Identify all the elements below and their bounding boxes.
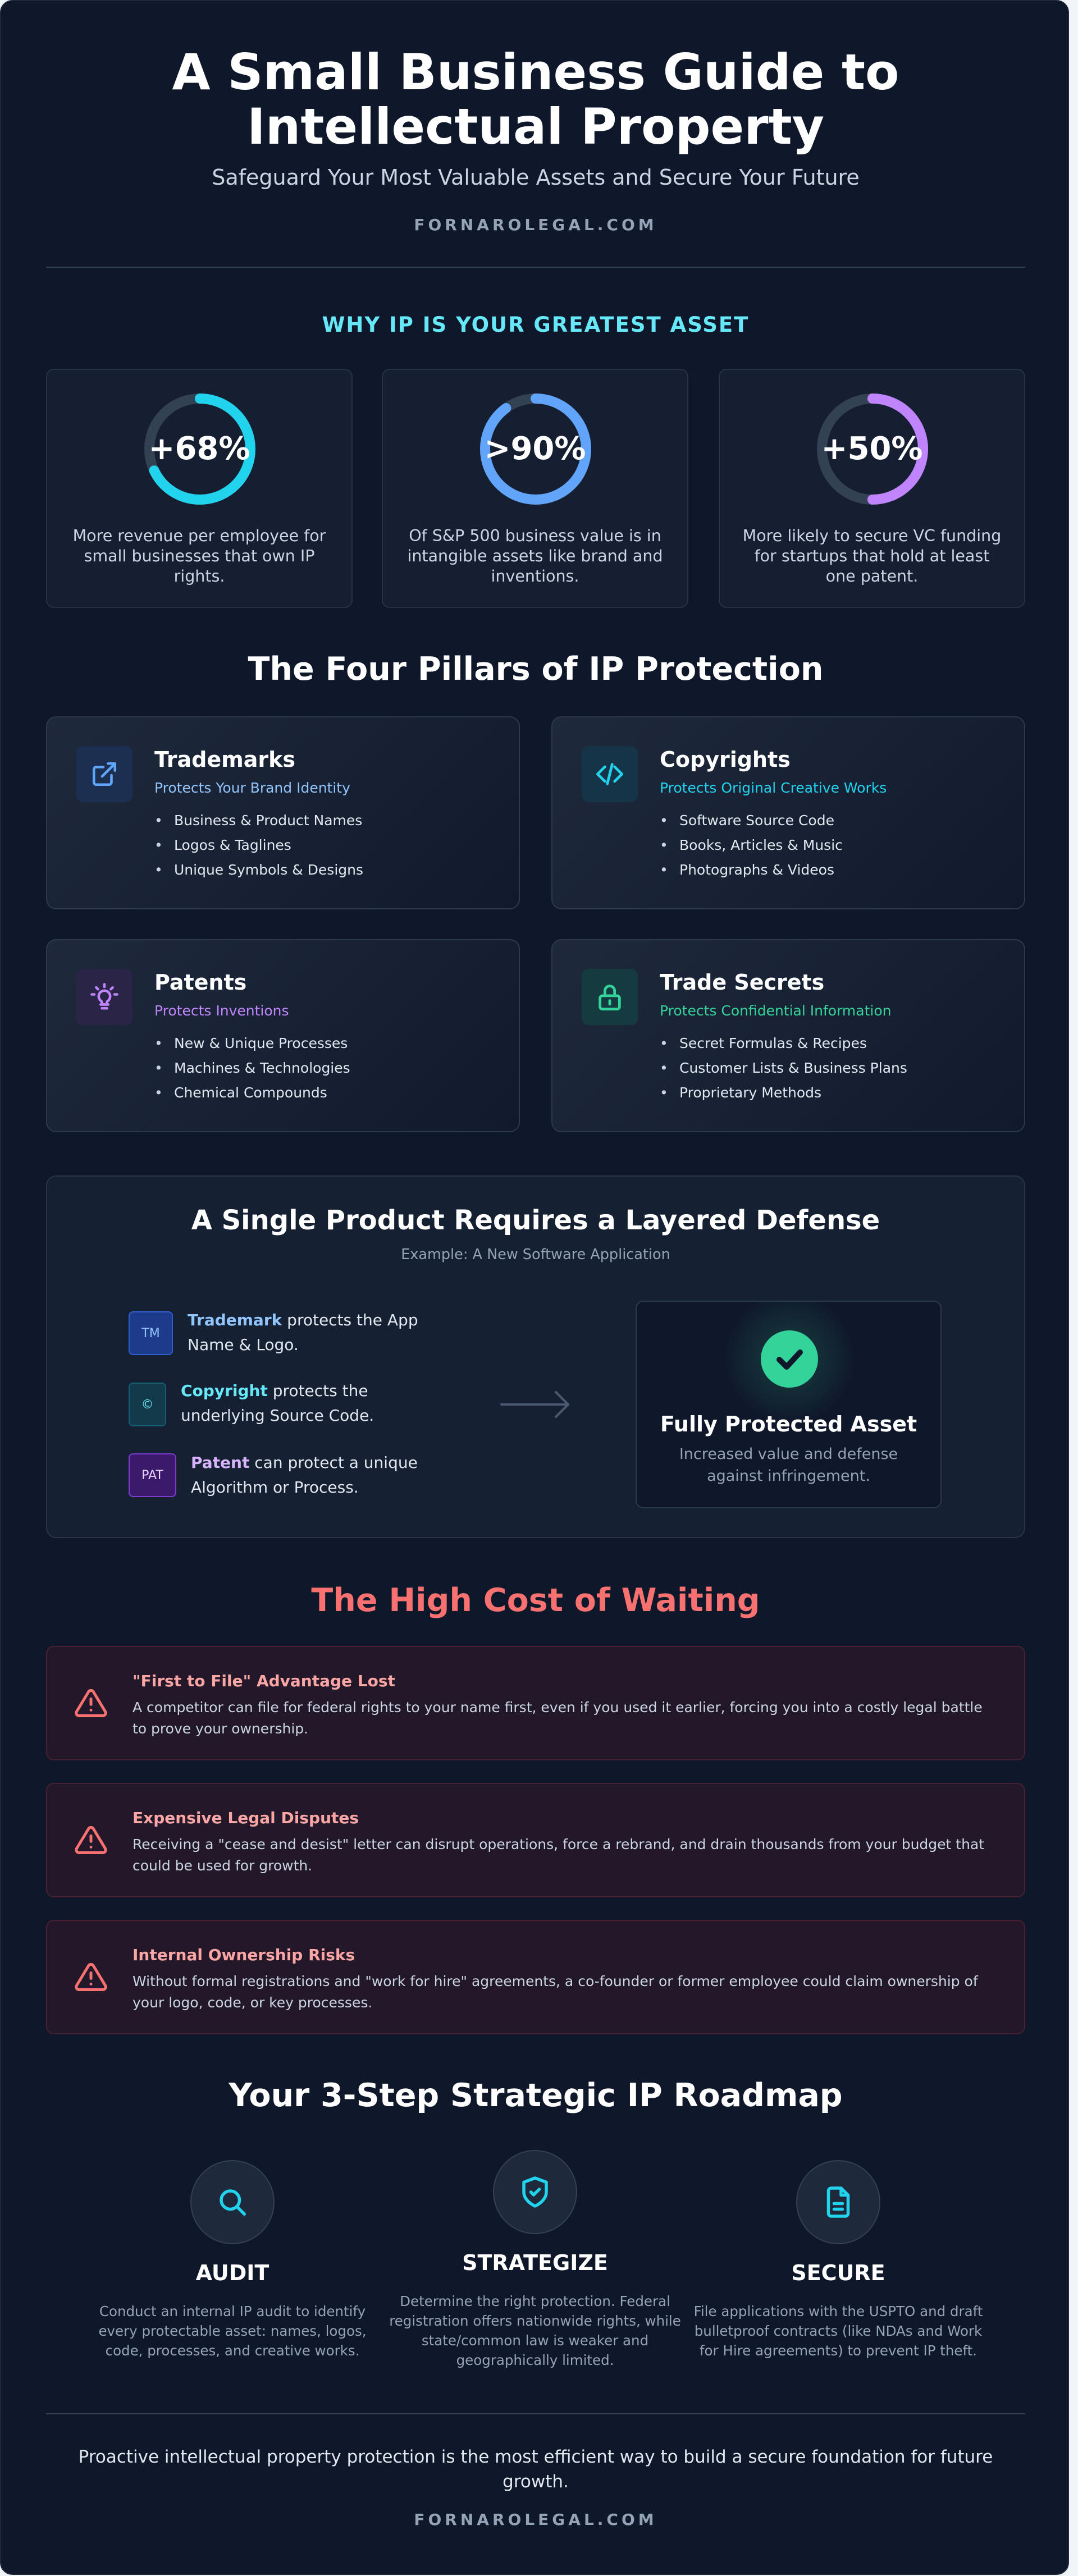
subtitle: Safeguard Your Most Valuable Assets and Secure Your Future bbox=[212, 165, 860, 190]
panel: patents bbox=[46, 939, 520, 1132]
ring chart 50 bbox=[817, 394, 928, 505]
brand: FORNAROLEGAL.COM bbox=[414, 216, 657, 234]
panel: patents: Protects Inventions bbox=[154, 1003, 289, 1019]
item: trademark: Name & Logo. bbox=[188, 1335, 299, 1354]
step: secure: File applications with the USPTO and draft bulletproof contracts (like NDAs and Work for Hire agreements) to prevent IP theft. bbox=[694, 2303, 983, 2359]
icon: warning bbox=[75, 1962, 107, 1991]
panel: patents: Patents bbox=[154, 970, 246, 995]
panel: trademarks: Trademarks bbox=[154, 747, 295, 772]
stat card 3: one patent. bbox=[826, 567, 918, 585]
icon: check bbox=[761, 1330, 818, 1388]
icon: lightbulb bbox=[76, 969, 133, 1025]
warning card 3 bbox=[46, 1920, 1025, 2034]
icon: external link bbox=[76, 746, 133, 802]
title: Intellectual Property bbox=[247, 98, 824, 155]
icon: search bbox=[190, 2160, 275, 2244]
panel: trade secrets: Trade Secrets bbox=[660, 970, 824, 995]
callout: fully protected asset: Increased value and defense bbox=[679, 1445, 898, 1463]
warning card 3: Without formal registrations and "work for hire" agreements, a co-founder or former employee could claim ownership of your logo, code, or key processes. bbox=[133, 1973, 978, 2011]
warning card 2 bbox=[46, 1783, 1025, 1897]
callout: fully protected asset: against infringement. bbox=[707, 1467, 870, 1485]
step: secure bbox=[694, 2160, 983, 2359]
stat card 1: +68% bbox=[149, 431, 250, 467]
item: copyright: © bbox=[141, 1398, 154, 1411]
warning card 1: A competitor can file for federal rights to your name first, even if you used it earlier, forcing you into a costly legal battle bbox=[133, 1699, 983, 1715]
panel: trade secrets: Proprietary Methods bbox=[679, 1085, 821, 1101]
warning card 2: Expensive Legal Disputes bbox=[133, 1809, 359, 1827]
step: audit: AUDIT bbox=[196, 2261, 269, 2285]
stat card 3 bbox=[719, 369, 1025, 608]
stat card 2: inventions. bbox=[491, 567, 579, 585]
panel: copyrights: Books, Articles & Music bbox=[679, 837, 843, 853]
icon: warning bbox=[75, 1689, 107, 1717]
panel: copyrights: Software Source Code bbox=[679, 812, 834, 829]
panel: copyrights: Protects Original Creative Works bbox=[660, 780, 887, 796]
panel: trademarks: Protects Your Brand Identity bbox=[154, 780, 350, 796]
callout: fully protected asset: Fully Protected Asset bbox=[660, 1412, 917, 1436]
item: patent: PAT bbox=[141, 1468, 163, 1482]
ring chart 90 bbox=[480, 394, 591, 505]
warning card 2: Receiving a "cease and desist" letter can disrupt operations, force a rebrand, and drain thousands from your budget that could be used for growth. bbox=[133, 1836, 984, 1874]
stat card 2: >90% bbox=[485, 431, 586, 467]
step: strategize: STRATEGIZE bbox=[462, 2250, 608, 2275]
panel: copyrights bbox=[551, 716, 1025, 909]
stat card 1 bbox=[46, 369, 353, 608]
ring chart 68 bbox=[144, 394, 255, 505]
heading: A Single Product Requires a Layered Defense bbox=[191, 1205, 880, 1236]
panel: trade secrets: Protects Confidential Information bbox=[660, 1003, 891, 1019]
panel: trade secrets bbox=[551, 939, 1025, 1132]
warning card 1: to prove your ownership. bbox=[133, 1721, 308, 1737]
item: patent: Patent can protect a unique bbox=[191, 1453, 418, 1472]
title bbox=[172, 43, 899, 155]
item: trademark: TM bbox=[141, 1326, 160, 1340]
footer brand: FORNAROLEGAL.COM bbox=[414, 2510, 657, 2529]
warning card 1 bbox=[46, 1646, 1025, 1760]
item: patent bbox=[129, 1453, 418, 1497]
icon: document bbox=[796, 2160, 880, 2244]
panel: trademarks bbox=[46, 716, 520, 909]
stat card 2 bbox=[382, 369, 688, 608]
stat card 1: More revenue per employee for bbox=[73, 527, 326, 545]
step: secure: SECURE bbox=[791, 2261, 885, 2285]
item: trademark: Trademark protects the App bbox=[188, 1311, 418, 1329]
step: strategize: Determine the right protection. Federal registration offers nationwide rights, while state/common law is weaker and geographically limited. bbox=[389, 2293, 681, 2368]
warning card 1: "First to File" Advantage Lost bbox=[133, 1672, 395, 1690]
panel: copyrights: Photographs & Videos bbox=[679, 862, 834, 878]
warning card 3: Internal Ownership Risks bbox=[133, 1946, 355, 1964]
callout: fully protected asset bbox=[636, 1301, 942, 1508]
item: copyright: Copyright protects the bbox=[181, 1381, 368, 1400]
subheading: Example: A New Software Application bbox=[401, 1246, 670, 1263]
panel: trademarks: Business & Product Names bbox=[174, 812, 362, 829]
step: audit: Conduct an internal IP audit to identify every protectable asset: names, logos, code, processes, and creative works. bbox=[98, 2303, 367, 2359]
heading: four pillars: The Four Pillars of IP Protection bbox=[248, 651, 823, 688]
item: copyright bbox=[129, 1381, 374, 1426]
panel: trade secrets: Secret Formulas & Recipes bbox=[679, 1035, 867, 1051]
stat card 2: intangible assets like brand and bbox=[407, 547, 663, 565]
title: A Small Business Guide to bbox=[172, 43, 899, 101]
stat card 3: for startups that hold at least bbox=[755, 547, 989, 565]
step: strategize bbox=[389, 2150, 681, 2368]
panel: patents: Machines & Technologies bbox=[174, 1060, 350, 1076]
panel: copyrights: Copyrights bbox=[660, 747, 791, 772]
icon: warning bbox=[75, 1825, 107, 1854]
icon: lock bbox=[582, 969, 638, 1025]
heading: high cost: The High Cost of Waiting bbox=[311, 1582, 760, 1619]
item: patent: Algorithm or Process. bbox=[191, 1478, 359, 1497]
panel: layered defense bbox=[46, 1175, 1025, 1538]
panel: patents: Chemical Compounds bbox=[174, 1085, 327, 1101]
panel: trademarks: Logos & Taglines bbox=[174, 837, 291, 853]
arrow bbox=[500, 1391, 569, 1418]
item: trademark bbox=[129, 1311, 418, 1355]
heading: roadmap: Your 3-Step Strategic IP Roadmap bbox=[229, 2077, 843, 2114]
stat card 3: More likely to secure VC funding bbox=[743, 527, 1001, 545]
icon: shield bbox=[493, 2150, 577, 2234]
step: audit bbox=[98, 2160, 367, 2359]
icon: code bbox=[582, 746, 638, 802]
panel: patents: New & Unique Processes bbox=[174, 1035, 348, 1051]
stat card 2: Of S&P 500 business value is in bbox=[409, 527, 661, 545]
footer text: Proactive intellectual property protection is the most efficient way to build a secure foundation for future growth. bbox=[79, 2447, 993, 2492]
item: copyright: underlying Source Code. bbox=[181, 1406, 374, 1425]
stat card 1: rights. bbox=[174, 567, 225, 585]
stat card 3: +50% bbox=[821, 431, 922, 467]
stat card 1: small businesses that own IP bbox=[84, 547, 315, 565]
panel: trade secrets: Customer Lists & Business Plans bbox=[679, 1060, 907, 1076]
panel: trademarks: Unique Symbols & Designs bbox=[174, 862, 363, 878]
section heading: why IP: WHY IP IS YOUR GREATEST ASSET bbox=[322, 313, 749, 337]
